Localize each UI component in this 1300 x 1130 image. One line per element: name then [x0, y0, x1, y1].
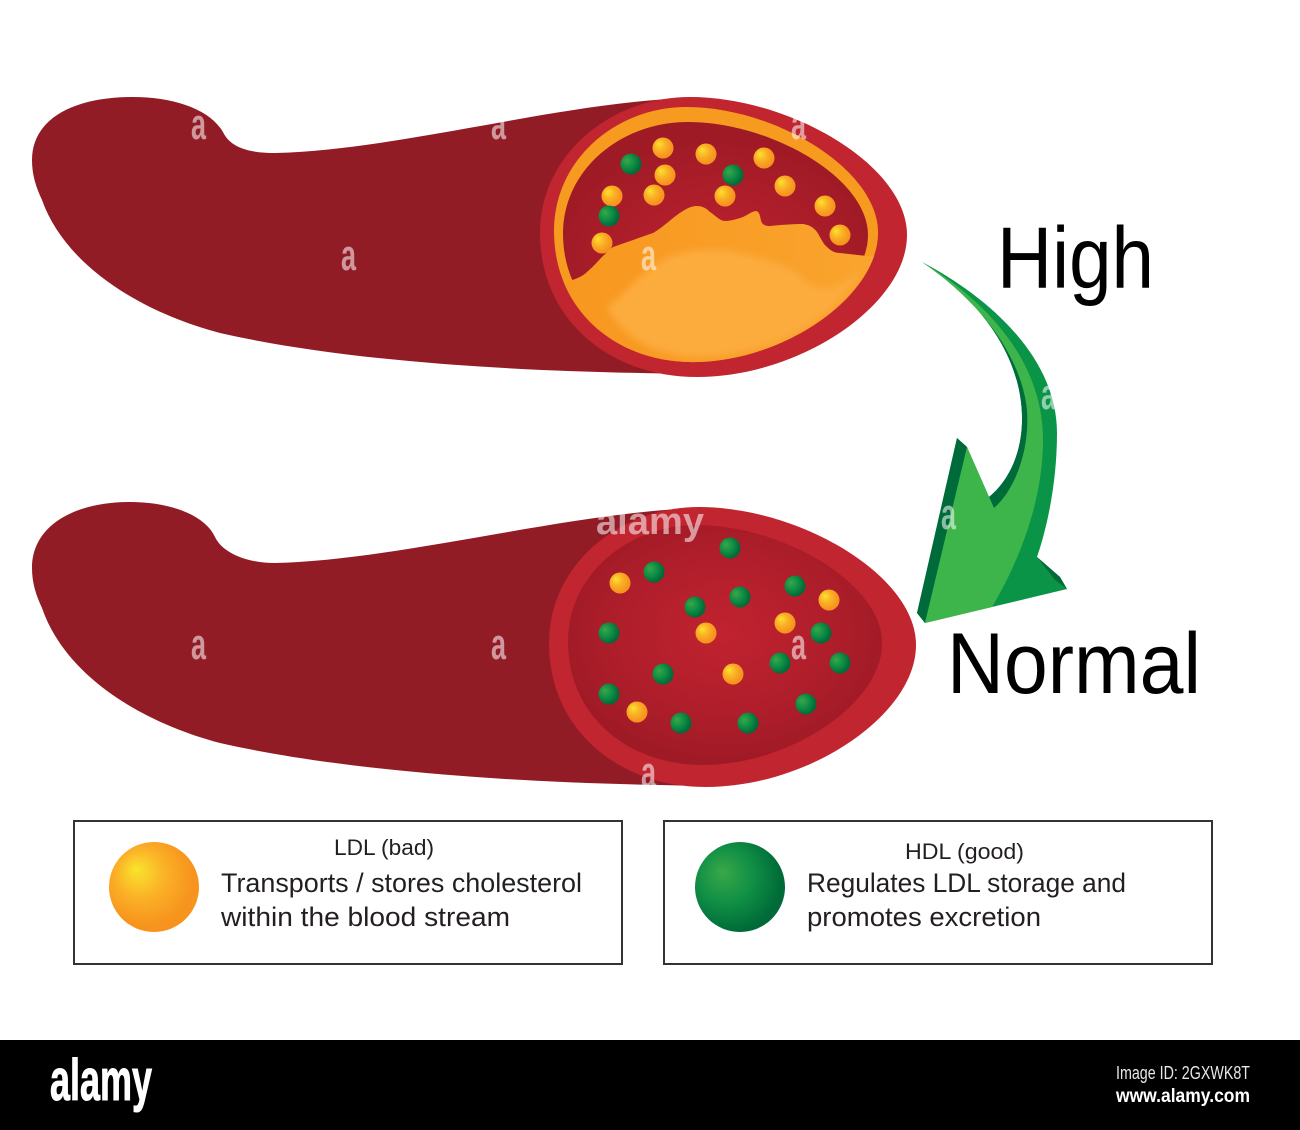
plaque deposit: [564, 206, 874, 362]
HDL particles: high: [598, 154, 744, 226]
HDL description: promotes excretion: [807, 902, 1041, 932]
footer logo: alamy: [50, 1048, 152, 1113]
watermarks: a: [491, 620, 506, 669]
watermarks: a: [791, 620, 806, 669]
watermarks: a: [641, 748, 656, 797]
watermarks: [191, 100, 1056, 797]
LDL description: Transports / stores cholesterol: [221, 868, 582, 898]
arrow silhouette: [917, 262, 1067, 623]
LDL particles: normal: [610, 572, 840, 722]
legend: LDL: [74, 821, 622, 964]
watermarks: a: [341, 231, 356, 280]
artery body: normal: [32, 502, 700, 786]
footer image id: Image ID: 2GXWK8T: [1116, 1063, 1250, 1083]
panel: high cholesterol artery: [32, 97, 907, 400]
watermarks: alamy: [596, 501, 704, 543]
footer url: www.alamy.com: [1115, 1086, 1250, 1107]
watermarks: a: [641, 231, 656, 280]
arrow left edge: [917, 438, 967, 623]
watermarks: a: [491, 100, 506, 149]
artery body: high: [32, 97, 690, 374]
panel: normal cholesterol artery: [32, 502, 916, 787]
LDL particles: high: [592, 138, 850, 254]
open lumen: high: [563, 122, 868, 352]
icon: LDL sphere: [109, 842, 199, 932]
label: Normal: Normal: [947, 616, 1201, 712]
label: High: High: [997, 210, 1154, 307]
arrow front face: [922, 262, 1043, 623]
watermarks: a: [941, 490, 956, 539]
cholesterol lining ring: [554, 107, 878, 362]
HDL description: Regulates LDL storage and: [807, 868, 1126, 898]
legend: HDL: [664, 821, 1212, 964]
LDL title: LDL (bad): [334, 835, 434, 860]
artery wall: normal: [549, 507, 916, 787]
watermarks: a: [191, 620, 206, 669]
LDL box: [74, 821, 622, 964]
arrow inner edge: [922, 262, 1027, 508]
watermarks: a: [791, 100, 806, 149]
HDL particles: normal: [598, 538, 850, 734]
footer bar: [0, 1040, 1300, 1130]
watermarks: a: [1041, 370, 1056, 419]
HDL box: [664, 821, 1212, 964]
artery wall: high: [540, 97, 907, 377]
arrow barb edge: [1037, 557, 1067, 589]
watermarks: a: [191, 100, 206, 149]
open lumen: normal: [568, 525, 882, 765]
LDL description: within the blood stream: [220, 902, 510, 932]
LDL description: [220, 868, 582, 932]
HDL title: HDL (good): [905, 839, 1024, 864]
light plaque core: [607, 250, 863, 357]
arrow: high to normal: [917, 262, 1067, 623]
HDL description: [807, 868, 1126, 932]
icon: HDL sphere: [695, 842, 785, 932]
